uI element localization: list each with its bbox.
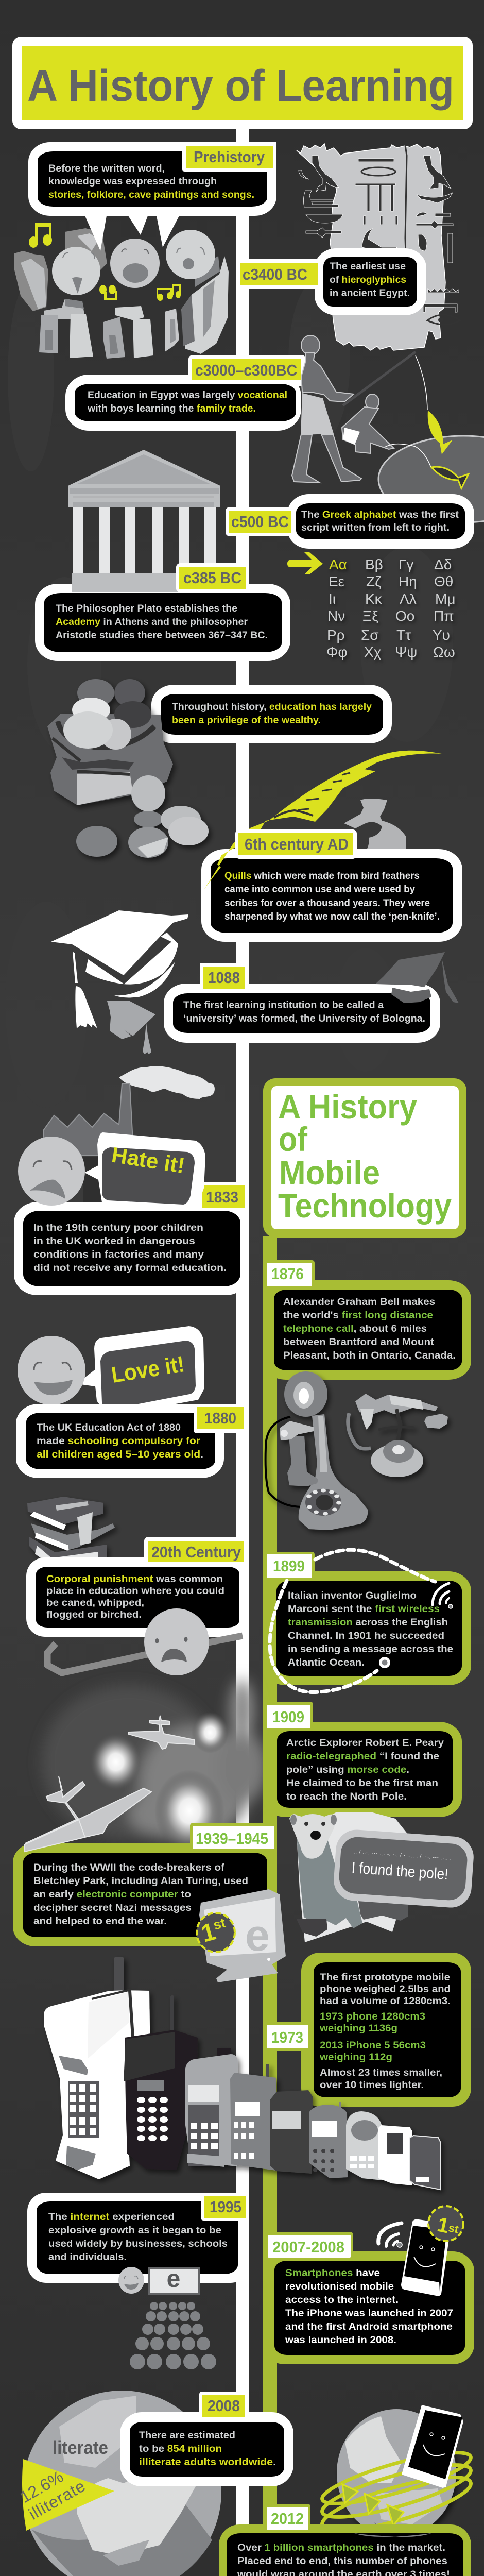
icon: signal end point	[379, 1657, 390, 1668]
body text: weighing 1136g	[319, 2023, 397, 2034]
body text: conditions in factories and many	[33, 1249, 204, 1260]
illustration: pond	[378, 436, 484, 522]
illiterate wedge	[16, 2459, 114, 2531]
greek alphabet: Ψψ	[395, 644, 417, 660]
date tag	[198, 1182, 249, 1208]
panel: c500 BC greek alphabet	[226, 494, 474, 549]
icon: dark graduation cap	[375, 952, 459, 1003]
illustration: cradle telephone	[348, 1394, 448, 1477]
mobile title text	[278, 1088, 452, 1225]
phone 4	[230, 2064, 276, 2171]
smartphone on globe	[402, 2405, 463, 2488]
mobile title text: Mobile	[279, 1154, 380, 1192]
greek alphabet: Ββ	[365, 556, 383, 572]
mobile title text: Technology	[278, 1187, 452, 1225]
timeline: learning	[236, 129, 249, 2576]
date tag	[263, 1552, 315, 1581]
date tag	[263, 1702, 313, 1731]
date tag	[263, 2232, 353, 2261]
body text: Over 1 billion smartphones in the market.	[237, 2543, 445, 2553]
phone 3	[185, 2048, 238, 2167]
title banner	[12, 37, 473, 129]
body text: Smartphones have	[285, 2268, 380, 2279]
body text: used widely by businesses, schools	[48, 2239, 228, 2249]
body text: The first learning institution to be called a	[183, 1000, 384, 1011]
icon: fish on the line	[428, 411, 453, 454]
date tag: 1939–1945	[196, 1829, 268, 1848]
panel: 1995 internet	[27, 2193, 249, 2295]
greek alphabet: Φφ	[326, 644, 347, 660]
icon: fish in pond	[431, 467, 469, 488]
date tag: c3000–c300BC	[195, 361, 297, 379]
body text: pole” using morse code .	[286, 1765, 409, 1775]
date tag: 1973	[271, 2028, 303, 2046]
panel: 1909 arctic explorer	[263, 1700, 462, 1817]
speech bubble: love it	[77, 1326, 204, 1416]
date tag: 1909	[272, 1708, 304, 1726]
body text	[224, 871, 440, 922]
bubble text: I found the pole!	[351, 1859, 449, 1883]
greek alphabet: Κκ	[365, 591, 383, 607]
body text: stories, folklore, cave paintings and songs.	[48, 190, 254, 200]
date tag: 20th Century	[151, 1543, 241, 1561]
dashed signal path	[270, 1550, 435, 1692]
icon: music notes	[29, 223, 181, 301]
date tag	[182, 142, 276, 172]
illustration: quill	[204, 751, 442, 890]
greek alphabet	[326, 556, 455, 660]
date tag: 1088	[208, 969, 240, 987]
date tag: 1995	[210, 2198, 241, 2216]
timeline: mobile technology	[263, 1236, 277, 2576]
icon: smiling smartphone	[401, 2219, 451, 2296]
greek alphabet: Ππ	[434, 608, 454, 624]
body text: the world's first long distance	[283, 1310, 433, 1321]
date tag: 1833	[206, 1188, 238, 1206]
greek alphabet: Δδ	[434, 556, 452, 572]
body text: did not receive any formal education.	[33, 1263, 227, 1274]
body text: Bletchley Park, including Alan Turing, used	[33, 1876, 248, 1887]
body text: During the WWII the code-breakers of	[33, 1862, 225, 1873]
mobile title text: A History	[278, 1088, 417, 1126]
date tag: 6th century AD	[245, 835, 349, 853]
icon: smiling face	[118, 2267, 144, 2294]
illustration: computer	[199, 1889, 286, 1982]
title banner: mobile technology	[263, 1078, 466, 1238]
illustration: bag of coins	[47, 679, 209, 858]
body text: ‘university’ was formed, the University of Bologna.	[183, 1013, 425, 1024]
date tag: 1876	[271, 1265, 304, 1283]
badge: 1st: st	[212, 1914, 227, 1933]
body text: He claimed to be the first man	[286, 1778, 438, 1789]
date tag	[200, 963, 249, 989]
greek alphabet: Οο	[395, 608, 414, 624]
icon: wifi signal	[378, 2223, 402, 2247]
icon: happy face	[18, 1336, 85, 1405]
body text: There are estimated	[139, 2430, 235, 2441]
date tag	[201, 2193, 249, 2221]
body text: The iPhone was launched in 2007	[285, 2308, 453, 2319]
date tag	[199, 2392, 249, 2417]
body text: illiterate adults worldwide .	[139, 2457, 276, 2468]
body text	[48, 2212, 228, 2263]
illustration: polar bear	[289, 1812, 412, 1942]
body text: over 10 times lighter.	[320, 2080, 424, 2091]
body text	[285, 2268, 453, 2346]
body text: The Philosopher Plato establishes the	[56, 603, 237, 614]
body text	[183, 1000, 425, 1024]
body text: all children aged 5–10 years old .	[37, 1449, 203, 1460]
body text: and the first Android smartphone	[285, 2321, 453, 2332]
illustration: greek temple	[68, 450, 220, 592]
body text	[33, 1223, 227, 1274]
panel: 2012 one billion smartphones	[219, 2504, 471, 2576]
body text: scribes for over a thousand years. They were	[224, 898, 430, 909]
illustration: computer: e	[245, 1911, 270, 1960]
date tag: 1880	[204, 1409, 236, 1427]
body text: The first prototype mobile	[320, 1972, 450, 1983]
mobile title text: of	[279, 1120, 308, 1158]
illustration: candlestick telephone	[266, 1371, 368, 1530]
body text: an early electronic computer to	[33, 1889, 191, 1900]
greek alphabet: Ττ	[396, 627, 411, 643]
greek alphabet: Θθ	[434, 573, 453, 589]
body text: to be 854 million	[139, 2444, 222, 2454]
panel: c385 BC plato's academy	[35, 563, 290, 661]
body text: revolutionised mobile	[285, 2281, 394, 2292]
body text: 1973 phone 1280cm3	[320, 2011, 425, 2022]
body text: in the UK worked in dangerous	[33, 1236, 195, 1247]
body text: radio-telegraphed “I found the	[286, 1751, 439, 1762]
body text: Channel. In 1901 he succeeded	[288, 1631, 444, 1641]
date tag: Prehistory	[194, 148, 265, 166]
date tag: c385 BC	[183, 569, 241, 587]
greek alphabet: Σσ	[361, 627, 379, 643]
badge: 1st: st	[447, 2221, 460, 2236]
body text	[319, 1972, 451, 2091]
icon: small plane	[129, 1716, 194, 1749]
illiterate wedge: 12.6%	[16, 2467, 66, 2506]
body text	[172, 702, 372, 726]
main title: A History of Learning	[27, 61, 454, 111]
phone 8	[378, 2125, 412, 2185]
panel: 1880 education act	[16, 1404, 249, 1478]
body text	[48, 163, 254, 200]
icon: sad face	[18, 1137, 85, 1206]
body text: Pleasant, both in Ontario, Canada.	[283, 1350, 456, 1361]
body text	[139, 2430, 276, 2468]
illustration: ink pot	[344, 799, 406, 855]
face 1	[52, 247, 100, 295]
body text: Atlantic Ocean.	[288, 1657, 365, 1668]
greek alphabet: Χχ	[364, 644, 382, 660]
illiterate wedge: illiterate	[26, 2477, 88, 2523]
date tag: c3400 BC	[243, 265, 307, 283]
body text: script written from left to right.	[301, 522, 450, 533]
date tag	[235, 829, 357, 859]
illustration: evolution of mobile phones	[44, 1957, 440, 2190]
icon: large plane	[25, 1776, 151, 1851]
panel: 20th century corporal punishment	[26, 1537, 249, 1637]
singing faces	[52, 216, 215, 295]
body text: 2013 iPhone 5 56cm3	[320, 2040, 426, 2051]
greek alphabet: Ρρ	[327, 627, 345, 643]
body text: Placed end to end, this number of phones	[237, 2556, 447, 2567]
greek alphabet: Εε	[329, 573, 344, 589]
illustration: egyptian father and son fishing	[292, 335, 431, 483]
body text	[286, 1738, 444, 1802]
illustration: plane over panel	[25, 1820, 85, 1852]
body text: between Brantford and Mount	[283, 1337, 435, 1348]
body text: Arctic Explorer Robert E. Peary	[286, 1738, 444, 1749]
panel: 2008 illiteracy	[120, 2392, 293, 2486]
badge: 1st: 1	[198, 1918, 219, 1948]
panel: 1833 child labour	[14, 1182, 249, 1295]
body text: Throughout history, education has largely	[172, 702, 372, 713]
body text: place in education where you could	[46, 1586, 224, 1597]
illustration: stack of books	[27, 1497, 115, 1564]
body text	[237, 2543, 450, 2576]
orbit rings	[318, 2443, 475, 2541]
illustration: hieroglyph papyrus	[297, 144, 460, 350]
body text: sharpened by what we now call the ‘pen-knife’.	[224, 911, 440, 922]
panel: 6th century AD quills	[201, 751, 462, 942]
body text: came into common use and were used by	[224, 884, 415, 895]
body text: Quills which were made from bird feathers	[224, 871, 420, 882]
illustration: stonehenge	[14, 228, 229, 359]
body text: in sending a message across the	[288, 1644, 453, 1655]
arrowheads	[342, 2484, 404, 2526]
date tag	[263, 1260, 315, 1289]
icon: e on screen	[148, 2265, 200, 2295]
phone 6	[309, 2102, 348, 2178]
body text: The earliest use	[330, 261, 406, 272]
body text: Before the written word,	[48, 163, 165, 174]
panel: 1088 university of bologna	[164, 963, 440, 1043]
body text: The Greek alphabet was the first	[301, 510, 459, 520]
body text: transmission across the English	[288, 1617, 448, 1628]
body text: was launched in 2008.	[285, 2335, 396, 2346]
body text: Almost 23 times smaller,	[320, 2067, 442, 2078]
body text: access to the internet.	[285, 2295, 399, 2306]
body text	[87, 390, 287, 414]
panel: c3400 BC hieroglyphics	[236, 248, 426, 315]
panel: 1939-1945 code-breakers	[13, 1823, 277, 1946]
date tag	[263, 2504, 310, 2533]
body text: Italian inventor Guglielmo	[288, 1590, 417, 1601]
body text: Aristotle studies there between 367–347 BC.	[56, 630, 268, 641]
literate label: literate	[53, 2437, 108, 2458]
body text: flogged or birched.	[46, 1609, 142, 1620]
date tag: c500 BC	[231, 513, 289, 531]
body text: Academy in Athens and the philosopher	[56, 617, 248, 628]
greek alphabet: Νν	[327, 608, 345, 624]
speech bubble: i found the pole	[333, 1828, 475, 1909]
body text: phone weighed 2.5lbs and	[320, 1984, 451, 1995]
date tag: 1899	[273, 1557, 305, 1575]
phone 2	[124, 1995, 198, 2170]
speech bubble: hate it: Hate it!	[110, 1142, 186, 1178]
body text: decipher secret Nazi messages	[33, 1903, 192, 1913]
face 2	[110, 239, 160, 288]
date tag	[176, 563, 249, 592]
illustration: cane	[47, 1636, 243, 1673]
body text: In the 19th century poor children	[33, 1223, 203, 1233]
badge: 1st	[197, 1913, 235, 1952]
body text: Marconi sent the first wireless	[288, 1604, 440, 1615]
greek alphabet: Υυ	[433, 627, 450, 643]
body text	[33, 1862, 248, 1927]
phone 5	[270, 2090, 313, 2174]
greek alphabet: Ξξ	[362, 608, 378, 624]
body text	[37, 1422, 203, 1460]
panel: prehistory	[28, 142, 276, 216]
body text: explosive growth as it began to be	[48, 2225, 221, 2236]
body text: been a privilege of the wealthy.	[172, 715, 321, 726]
date tag	[144, 1537, 249, 1566]
body text: to reach the North Pole.	[286, 1791, 407, 1802]
date tag	[190, 1823, 277, 1852]
icon: frightened face	[144, 1608, 209, 1675]
body text: Education in Egypt was largely vocational	[88, 390, 287, 401]
body text: had a volume of 1280cm3.	[320, 1996, 451, 2007]
greek alphabet: Ζζ	[366, 573, 381, 589]
badge: 1st	[428, 2206, 463, 2241]
panel: 2007-2008 smartphones	[263, 2232, 474, 2364]
body text	[283, 1297, 456, 1361]
speech bubble: love it: Love it!	[110, 1351, 186, 1388]
panel: education and wealth	[151, 685, 392, 743]
icon: e on screen: e	[167, 2265, 180, 2293]
date tag: 2008	[208, 2397, 240, 2415]
icon: small graduation cap	[107, 1001, 155, 1054]
illustration: literacy globe	[16, 2391, 221, 2576]
face 3	[166, 230, 215, 279]
greek alphabet: Λλ	[400, 591, 417, 607]
panel: 1876 telephone call	[263, 1257, 471, 1380]
body text: be caned, whipped,	[46, 1598, 144, 1608]
greek alphabet: Ηη	[399, 573, 417, 589]
body text	[301, 510, 459, 533]
greek alphabet: Ωω	[433, 644, 455, 660]
phone 1	[44, 1957, 150, 2179]
phone 7	[346, 2111, 383, 2180]
body text: The internet experienced	[48, 2212, 175, 2223]
body text	[56, 603, 268, 641]
greek alphabet: Αα	[329, 556, 347, 572]
body text: and helped to end the war.	[33, 1916, 167, 1927]
body text: Alexander Graham Bell makes	[283, 1297, 435, 1308]
body text: with boys learning the family trade.	[87, 403, 256, 414]
panel: 1899 wireless transmission	[263, 1550, 471, 1692]
badge: 1st: 1	[435, 2213, 451, 2238]
illustration: factory	[44, 1066, 215, 1203]
body text: Corporal punishment was common	[46, 1574, 223, 1585]
body text: knowledge was expressed through	[48, 176, 217, 187]
icon: wifi signal	[433, 1583, 453, 1608]
body text: made schooling compulsory for	[37, 1436, 201, 1447]
body text: and individuals.	[48, 2252, 127, 2263]
illustration: explosions and smoke	[41, 1680, 268, 1852]
phone 9	[409, 2136, 440, 2190]
date tag	[267, 2025, 308, 2048]
body text	[330, 261, 410, 299]
greek alphabet: Ιι	[329, 591, 336, 607]
body text: The UK Education Act of 1880	[37, 1422, 181, 1433]
globe base over panel	[354, 2533, 431, 2537]
illustration: globe wrapped by phones	[318, 2405, 475, 2541]
icon: large graduation cap	[51, 910, 188, 1028]
body text: in ancient Egypt.	[330, 288, 410, 299]
panel: 1973 first mobile phone	[263, 1953, 471, 2107]
panel: c3000-c300 BC vocational education	[65, 355, 306, 431]
greek alphabet: Μμ	[435, 591, 455, 607]
date tag: 2012	[271, 2510, 304, 2528]
morse code: .. / ..-. --- ..- -. -.. / - .... . / .--. --- .-.. .	[354, 1849, 452, 1861]
date tag: 2007-2008	[272, 2238, 344, 2256]
body text	[288, 1590, 453, 1668]
icon: arrow to alphabet	[287, 552, 323, 574]
body text: telephone call , about 6 miles	[283, 1324, 427, 1334]
body text: of hieroglyphics	[330, 275, 406, 285]
greek alphabet: Γγ	[399, 556, 413, 572]
speech bubble: hate it	[84, 1132, 205, 1206]
body text: weighing 112g	[319, 2052, 392, 2063]
body text	[46, 1574, 224, 1620]
date tag	[194, 1404, 249, 1433]
pictogram: crowd of people	[130, 2302, 216, 2369]
